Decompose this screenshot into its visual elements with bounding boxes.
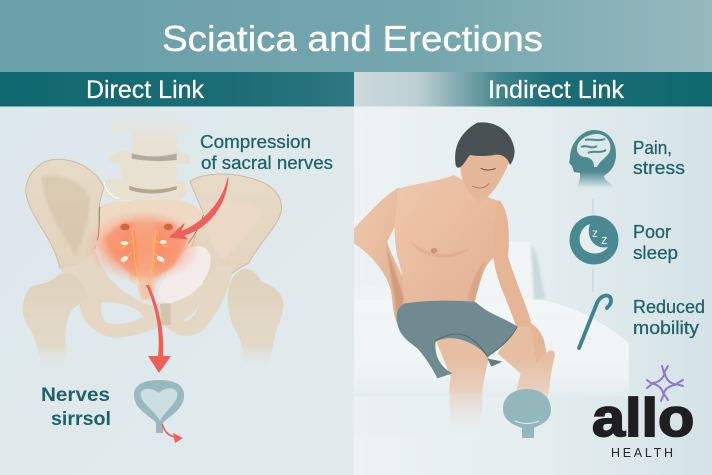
icon: moon and zzz: z — [592, 226, 598, 240]
shorts — [397, 301, 517, 378]
label: poor sleep — [633, 222, 678, 263]
left ilium — [26, 159, 104, 270]
neck and head — [460, 137, 511, 202]
arrow: down to bladder — [146, 285, 171, 373]
sacrum — [95, 200, 203, 299]
fade at bottom of figure — [354, 393, 554, 437]
logo icon: purple neuron — [647, 366, 683, 401]
label: poor sleep: Poor — [633, 222, 671, 242]
pillow and bed — [354, 212, 629, 397]
label: nerves — [41, 385, 111, 430]
label: reduced mobility — [633, 297, 705, 338]
label: pain, stress — [633, 138, 685, 178]
illustration: pelvis and lumbar spine — [23, 107, 284, 370]
icon: bladder, right panel — [503, 389, 551, 438]
heading band: Indirect Link — [354, 72, 712, 106]
lumbar vertebrae — [104, 107, 192, 200]
inflammation glow — [85, 210, 202, 283]
label: compression of sacral nerves: Compression — [200, 131, 311, 152]
pelvic ring and pubis — [60, 248, 233, 337]
back arm — [354, 187, 406, 323]
far leg — [497, 327, 555, 433]
arrow: to sacral nerves — [170, 178, 228, 239]
heading band: Direct Link: Direct Link — [86, 76, 204, 104]
header banner — [0, 0, 712, 72]
right femur — [228, 269, 284, 370]
label: reduced mobility: mobility — [633, 318, 699, 338]
sacral nerves — [122, 228, 167, 283]
title: Sciatica and Erections — [162, 18, 543, 59]
icon: walking cane — [579, 295, 611, 348]
label: nerves: Nerves — [41, 385, 110, 406]
label: pain, stress: Pain, — [633, 138, 672, 158]
illustration: man sitting on bed — [354, 122, 629, 437]
logo wordmark: allo — [592, 388, 694, 448]
obturator openings — [101, 302, 143, 324]
panel: indirect link background — [354, 106, 712, 475]
logo subtext: HEALTH — [611, 446, 673, 460]
heading band: Direct Link — [0, 72, 354, 106]
front arm — [493, 200, 546, 365]
icon: bladder with arrow — [134, 380, 184, 443]
left femur — [23, 273, 88, 370]
label: pain, stress: stress — [633, 158, 685, 178]
icon: moon and zzz: z — [601, 232, 608, 247]
label: poor sleep: sleep — [633, 243, 678, 263]
logo: allo health — [592, 366, 694, 460]
connector lines — [592, 198, 594, 292]
heading band: Indirect Link: Indirect Link — [488, 76, 624, 104]
label: compression of sacral nerves — [200, 131, 333, 173]
label: compression of sacral nerves: of sacral nerves — [201, 152, 333, 173]
icon: moon and zzz — [570, 216, 618, 264]
label: reduced mobility: Reduced — [633, 297, 705, 317]
torso — [395, 175, 506, 304]
sacral foramina — [120, 240, 167, 263]
near leg — [436, 337, 489, 437]
panel: direct link background — [0, 106, 354, 475]
right ilium — [187, 174, 282, 293]
label: nerves: sirrsol — [51, 409, 111, 430]
icon: brain in head — [569, 130, 616, 188]
